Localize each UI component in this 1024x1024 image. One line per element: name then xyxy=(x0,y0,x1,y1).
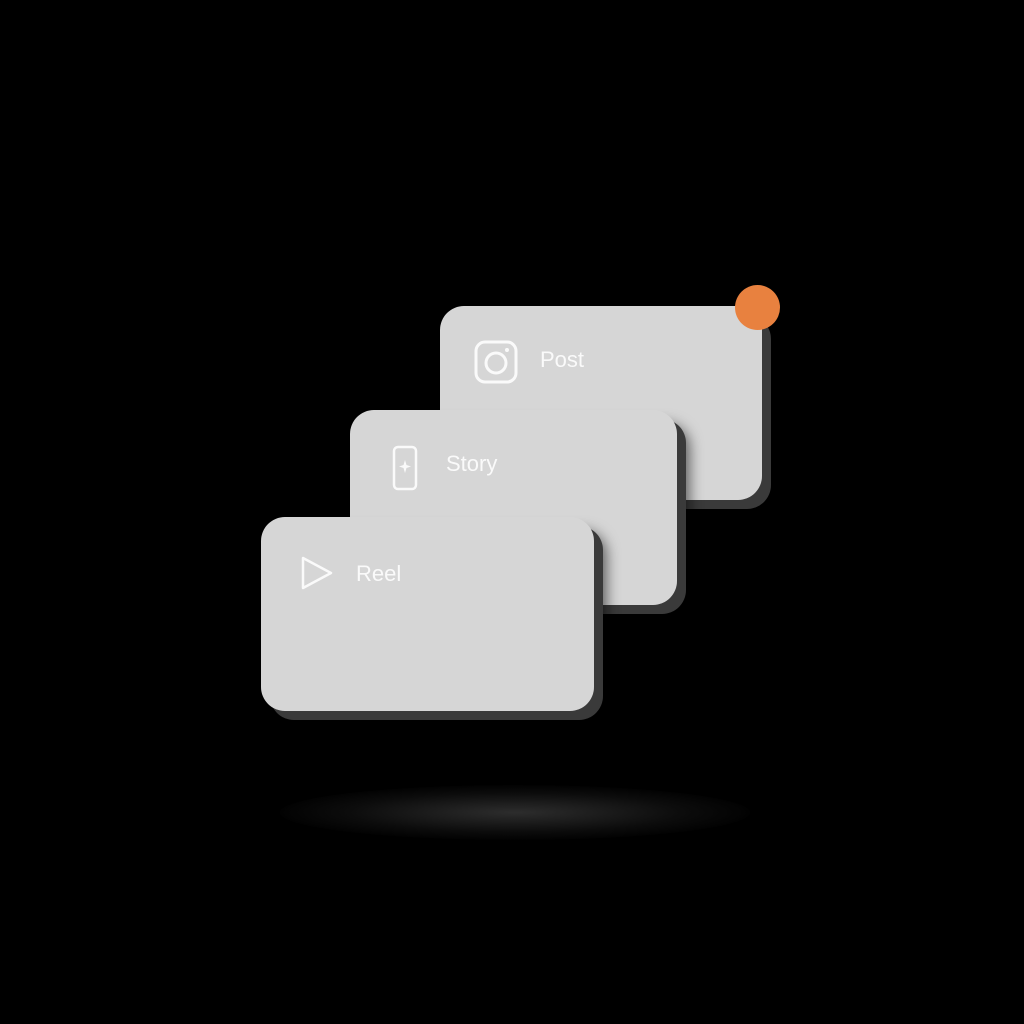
floor shadow glow xyxy=(280,785,750,840)
card: Post xyxy=(440,306,762,500)
label: Post: Post xyxy=(540,347,584,372)
label: Reel: Reel xyxy=(356,561,401,586)
icon: phone xyxy=(392,446,418,490)
notification dot xyxy=(735,285,780,330)
icon: play xyxy=(302,556,332,590)
icon: camera xyxy=(474,340,518,384)
card: Story xyxy=(350,410,677,605)
label: Story: Story xyxy=(446,451,497,476)
card: Reel xyxy=(261,517,594,711)
